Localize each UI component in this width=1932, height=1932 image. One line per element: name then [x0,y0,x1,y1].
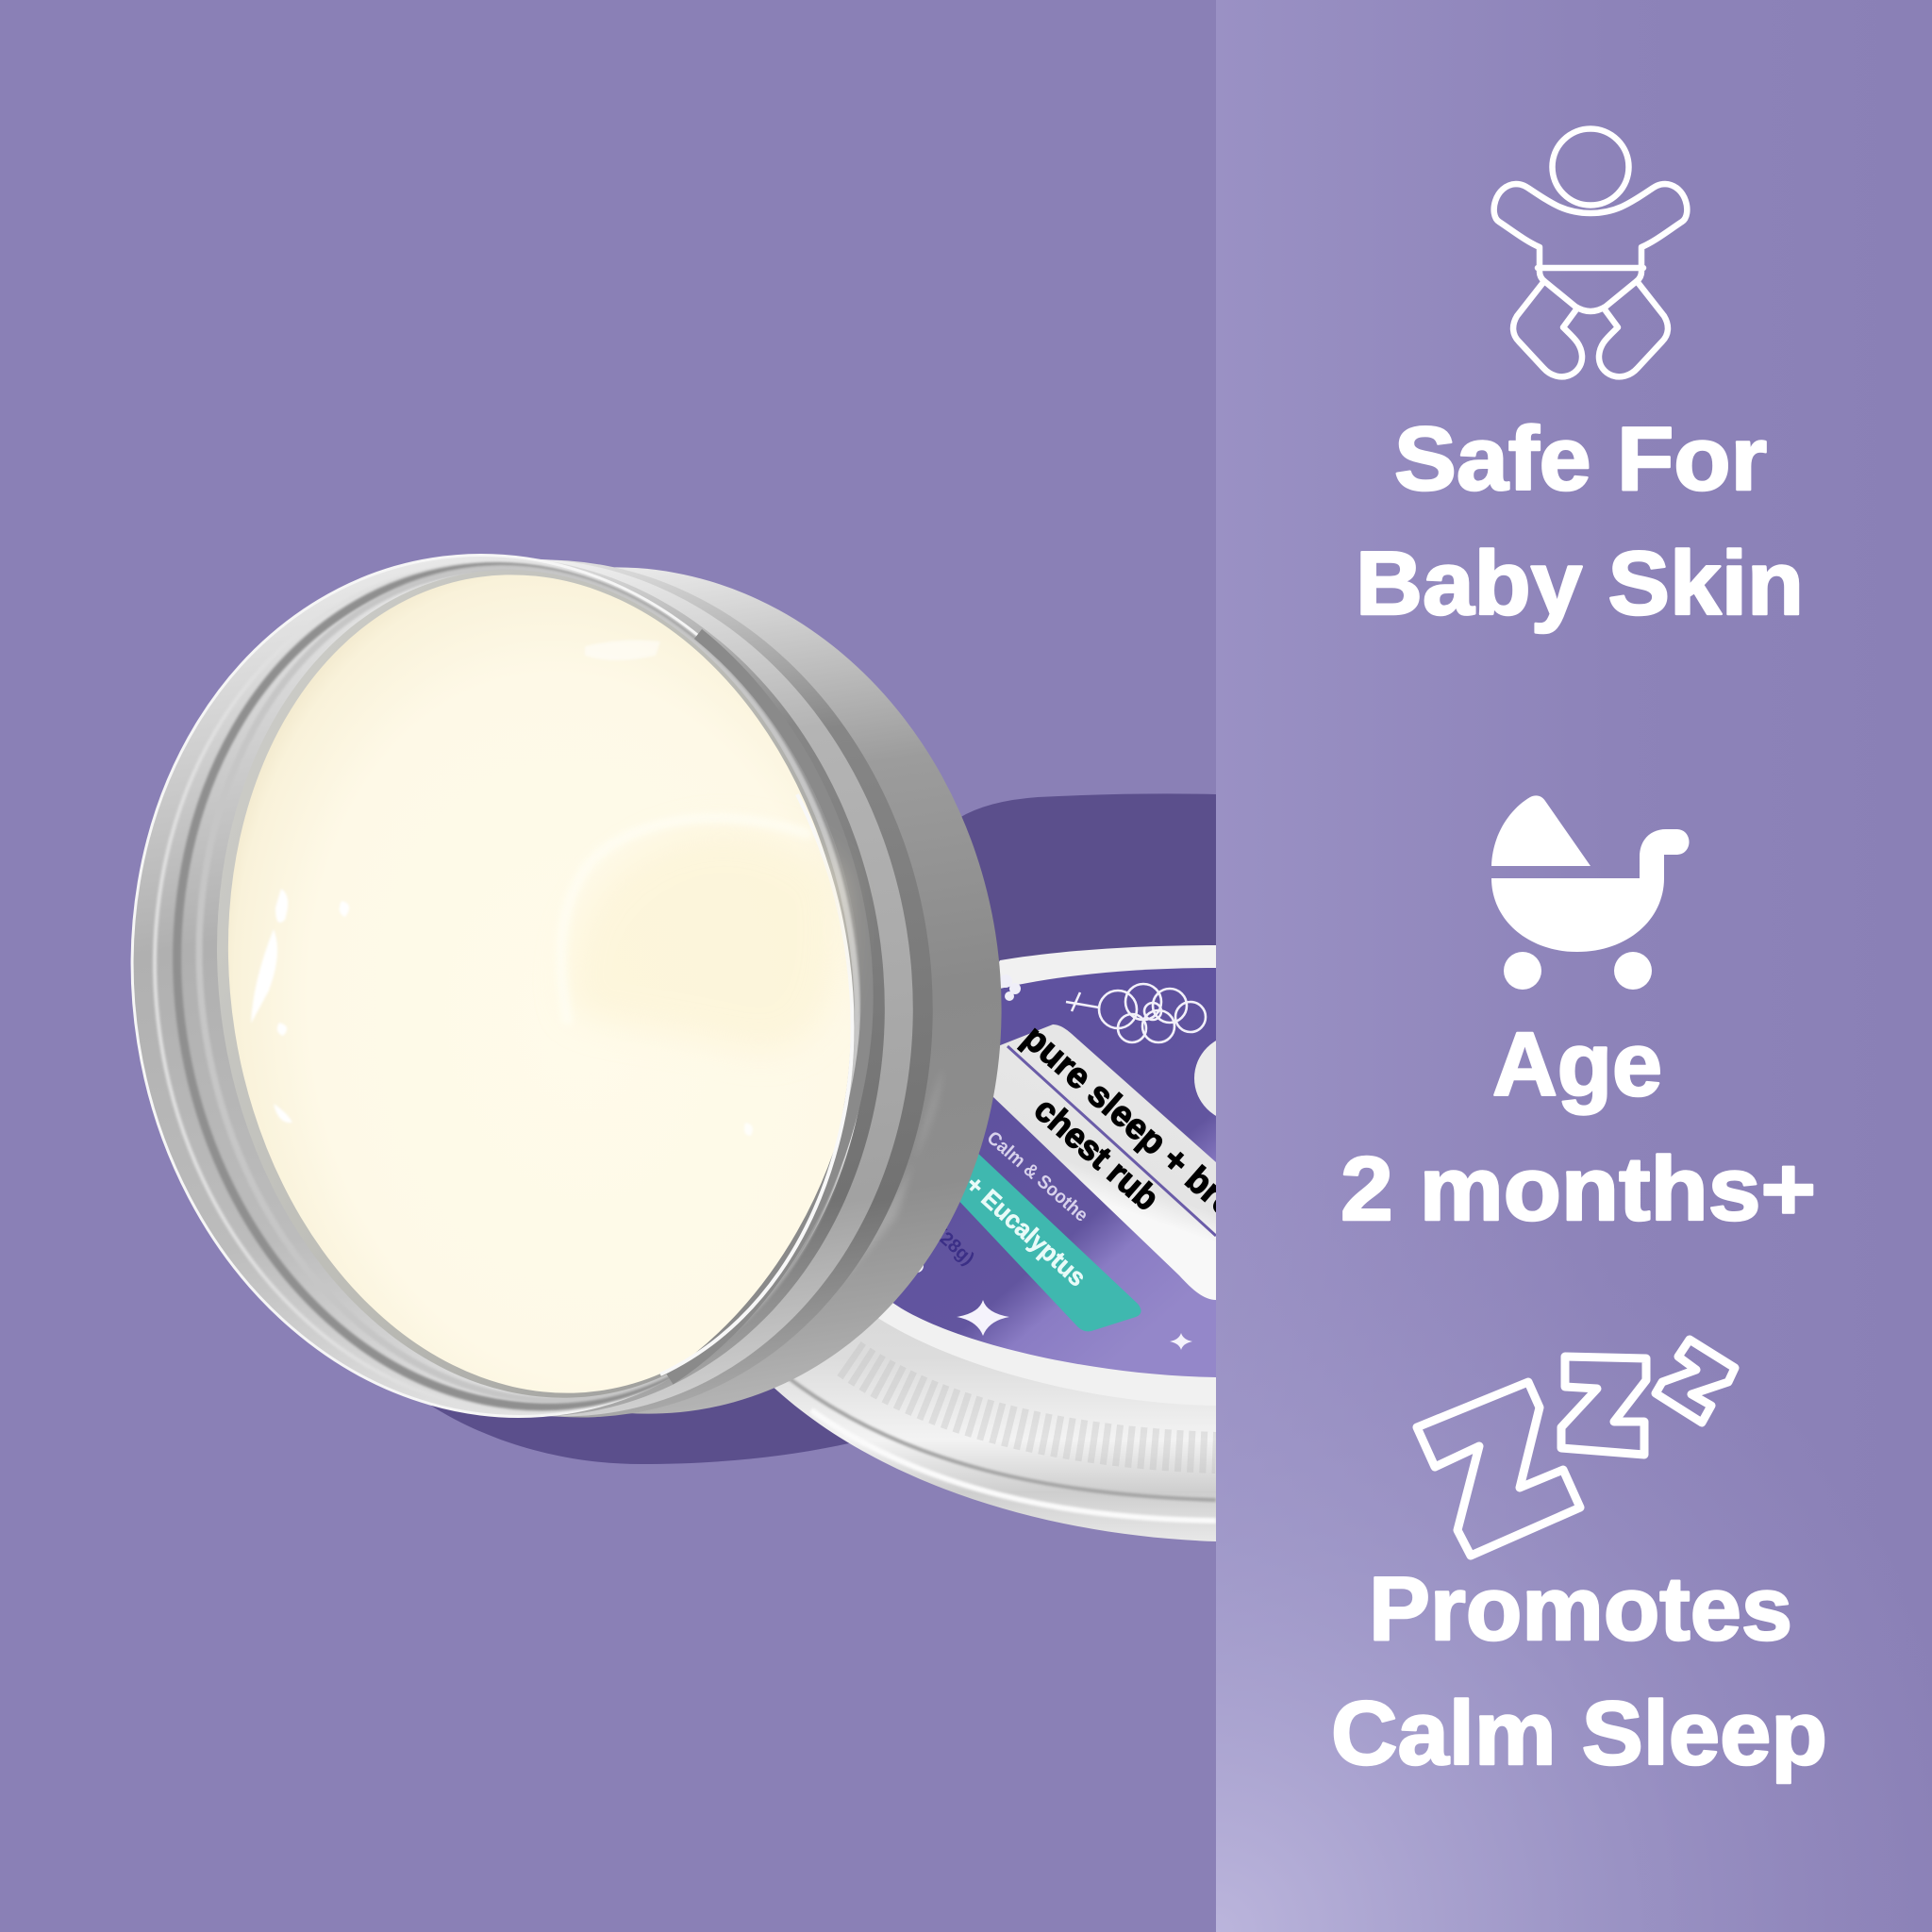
net weight: (28g) [931,1224,978,1270]
label tagline: Calm & Soothe [983,1127,1091,1226]
label subtitle: chest rub [1027,1090,1166,1218]
sparkle large [957,1300,1009,1336]
teal ingredient band [953,1150,1141,1331]
benefit: age 2 months+ [1341,795,1816,1240]
rim inner streaks [94,512,924,1463]
jar rim [71,502,929,1470]
subheading: Baby Skin [1356,533,1804,634]
inner wall [158,524,913,1444]
lid metal side [774,1319,1216,1541]
subheading: Calm Sleep [1331,1683,1827,1784]
heading: Promotes [1369,1558,1792,1659]
icon: zzz [1417,1340,1735,1556]
dark wall on right [670,634,867,1379]
heading: Safe For [1394,408,1767,509]
lid purple label [877,968,1216,1377]
sparkle small [1170,1333,1192,1350]
balm surface [171,529,908,1439]
label title: pure sleep + bre [1015,1018,1244,1224]
product: open jar of balm [71,502,1062,1471]
lighter reflection on body [708,1066,943,1368]
benefit: promotes calm sleep [1331,1340,1827,1784]
icon: stroller [1491,795,1689,990]
lid moon circle [1194,1035,1281,1122]
label divider line [1008,1046,1216,1236]
icon: baby [1494,128,1687,376]
white label band [972,1024,1216,1300]
jar body [202,514,1062,1467]
right panel [1216,0,1932,1932]
sheep illustration [1066,984,1206,1042]
flower fragments [902,974,1021,1279]
product: tin lid [774,945,1216,1541]
balm highlights [251,640,753,1136]
inner bright rim line [660,794,853,1374]
background [0,0,1216,1932]
cast shadows [431,793,1216,1464]
balm swirl [570,830,839,1050]
benefit: safe for baby skin [1356,128,1804,634]
teal ingredient band: + Eucalyptus [960,1170,1091,1292]
subheading: 2 months+ [1341,1139,1816,1240]
heading: Age [1492,1014,1662,1115]
jar thread bands [132,507,994,1471]
lid white edge [845,945,1216,1406]
